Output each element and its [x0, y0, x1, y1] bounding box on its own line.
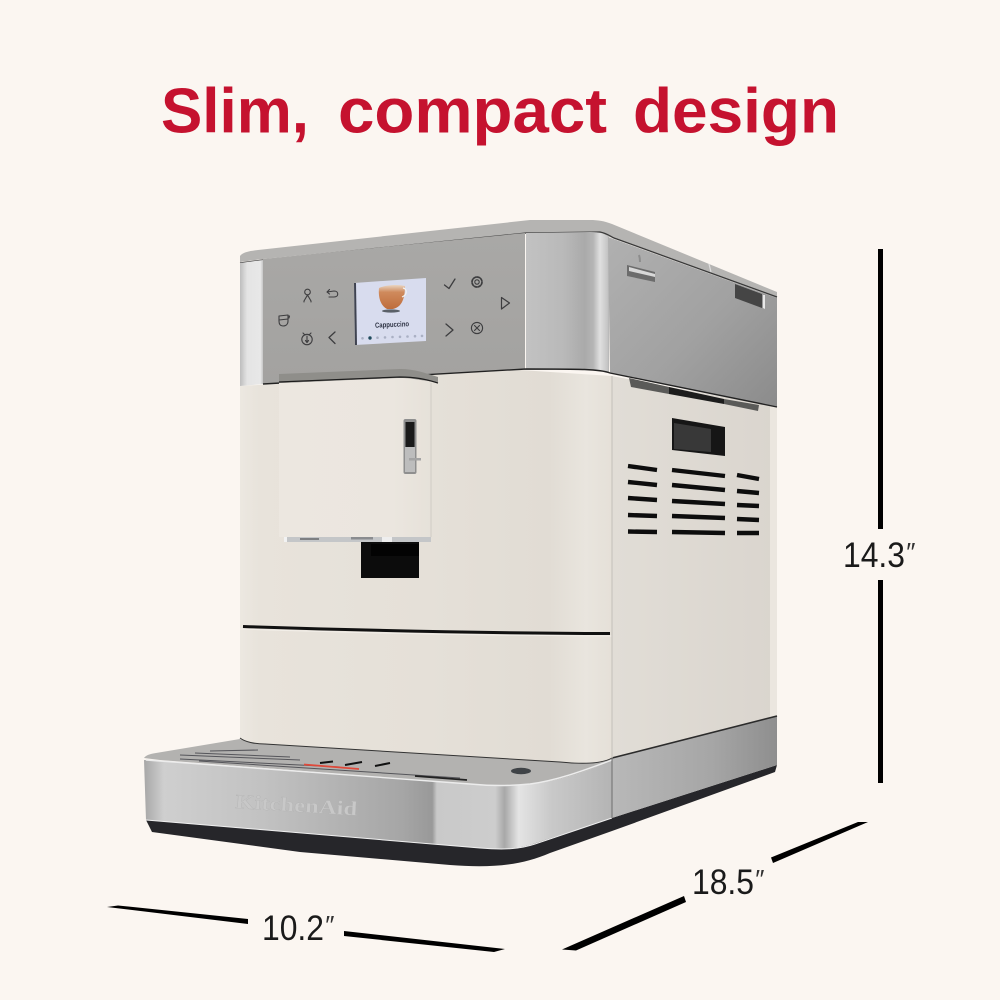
- chrome spouts: [284, 537, 431, 542]
- icon: chevron right: [446, 324, 453, 336]
- module face: [279, 378, 431, 537]
- icon: chevron left: [329, 332, 335, 344]
- side vents: [628, 466, 759, 533]
- module lip: [279, 369, 438, 383]
- red indicator: [304, 764, 359, 769]
- title: Slim,: [161, 76, 309, 146]
- side handle recess: [672, 418, 725, 456]
- shadow under top panel: [629, 378, 759, 411]
- pagination dots: [361, 335, 423, 340]
- sensor dot: [511, 768, 531, 774]
- icon: cup: [279, 315, 290, 326]
- title: compact: [338, 76, 607, 146]
- right grey top panel: [263, 237, 777, 407]
- dimension: depth: 18.5: [692, 863, 754, 902]
- coffee machine: [144, 220, 777, 866]
- side base plate: [612, 716, 777, 818]
- coffee outlet module: [279, 369, 439, 578]
- screen: [354, 278, 426, 345]
- module slider: [404, 419, 421, 474]
- cream front body: [240, 370, 612, 763]
- dimension: height: [843, 249, 915, 783]
- icon: bean: [302, 333, 312, 345]
- screen label: Cappuccino: [375, 319, 410, 330]
- drip tray front: [144, 758, 612, 849]
- icon: gear: [472, 277, 482, 287]
- title: design: [633, 76, 839, 146]
- title: [161, 76, 839, 146]
- dimension: width: 10.2: [262, 909, 324, 948]
- brushed metal corner: [526, 232, 609, 372]
- tray slots: [180, 750, 467, 780]
- hopper notch: [735, 284, 765, 309]
- top rim: [240, 220, 777, 298]
- control panel: [263, 233, 525, 384]
- dimension: depth: [562, 822, 868, 950]
- icon: back arrow: [327, 290, 338, 297]
- panel icons: [279, 277, 510, 345]
- dispenser recess: [361, 542, 419, 578]
- dimension: height: 14.3: [843, 536, 905, 575]
- right side cream wall: [612, 376, 777, 758]
- water tank handle: [627, 255, 655, 282]
- drip tray top: [144, 738, 612, 785]
- module shadow: [431, 382, 439, 540]
- black base foot: [146, 765, 777, 866]
- dimension: height: ″: [905, 537, 915, 567]
- dimension: depth: ″: [754, 864, 764, 894]
- icon: person: [304, 289, 311, 302]
- icon: check: [444, 279, 455, 288]
- embossed brand: KitchenAid: [235, 791, 358, 820]
- dimension: width: [107, 906, 505, 952]
- icon: cancel: [471, 322, 483, 334]
- icon: play: [502, 298, 510, 309]
- dimension: width: ″: [324, 910, 334, 940]
- left metal strip: [240, 260, 263, 386]
- coffee cup image: [379, 285, 406, 313]
